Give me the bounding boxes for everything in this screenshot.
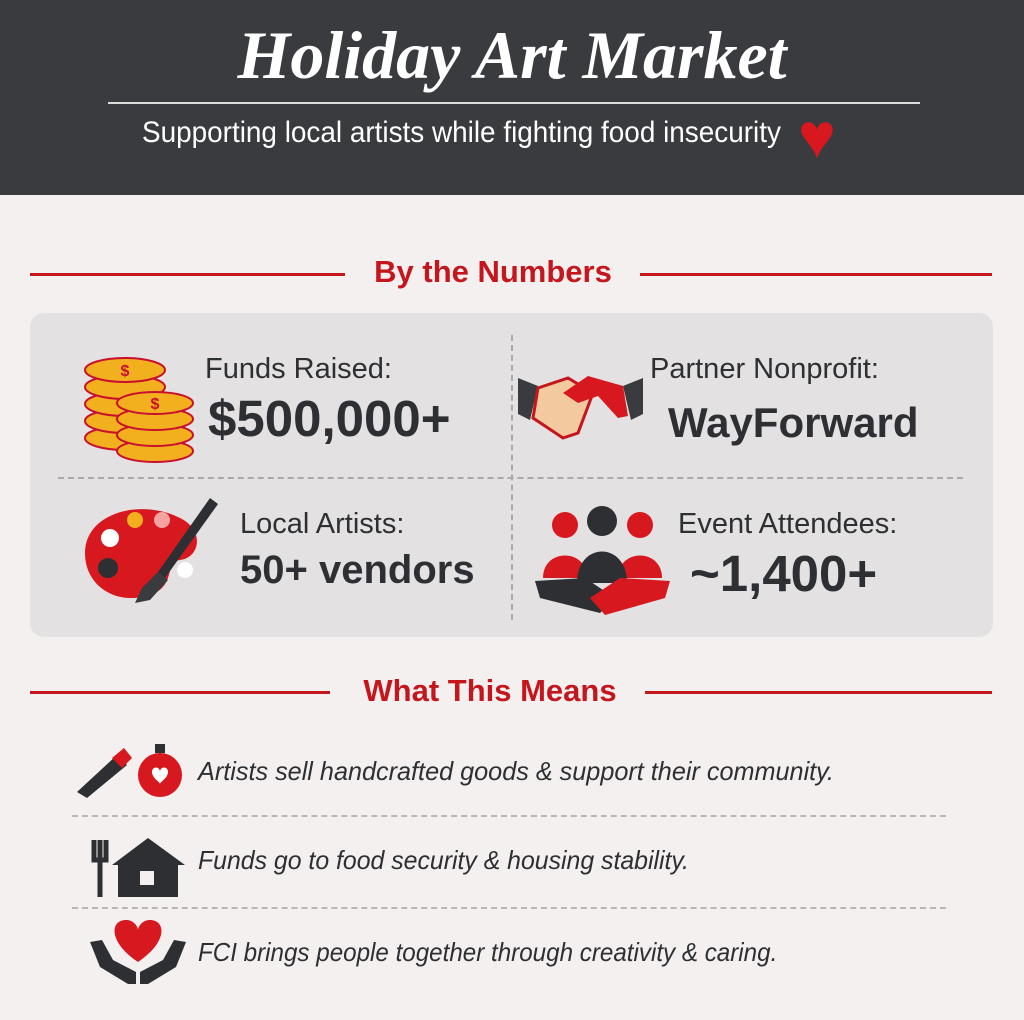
icon: hands with heart xyxy=(90,920,186,984)
panel: stats xyxy=(30,313,993,637)
icon: coins: $ xyxy=(151,396,160,413)
stat: partner: WayForward xyxy=(668,399,918,446)
stat: artists xyxy=(85,498,475,603)
stat: funds: Funds Raised: xyxy=(205,353,392,385)
row 2: Funds go to food security & housing stability. xyxy=(198,845,689,875)
stat: partner xyxy=(518,353,918,446)
icon: coins: $ xyxy=(121,363,130,380)
stat: funds xyxy=(84,353,450,463)
icon: brush and ornament xyxy=(77,744,182,798)
icon: people xyxy=(535,506,670,615)
row 1: Artists sell handcrafted goods & support their community. xyxy=(198,756,834,786)
icon: coins xyxy=(84,357,194,463)
row 3: FCI brings people together through creativity & caring. xyxy=(198,937,777,967)
heading: what this means: What This Means xyxy=(363,673,617,708)
stat: partner: Partner Nonprofit: xyxy=(650,353,879,385)
heading: by the numbers: By the Numbers xyxy=(374,254,612,289)
stat: funds: $500,000+ xyxy=(208,390,450,447)
row 1 xyxy=(77,744,834,798)
subtitle: Supporting local artists while fighting food insecurity xyxy=(142,116,781,149)
icon: handshake xyxy=(518,376,643,440)
stat: attendees xyxy=(535,506,897,615)
icon: heart: ♥ xyxy=(798,100,836,172)
row 2 xyxy=(92,838,689,897)
stat: artists: Local Artists: xyxy=(240,508,404,540)
header xyxy=(0,0,1024,195)
title: Holiday Art Market xyxy=(237,17,787,93)
icon: fork and house xyxy=(92,838,185,897)
row 3 xyxy=(90,920,777,984)
icon: palette xyxy=(85,498,218,603)
stat: artists: 50+ vendors xyxy=(240,548,475,592)
stat: attendees: Event Attendees: xyxy=(678,508,897,540)
stat: attendees: ~1,400+ xyxy=(690,545,877,602)
